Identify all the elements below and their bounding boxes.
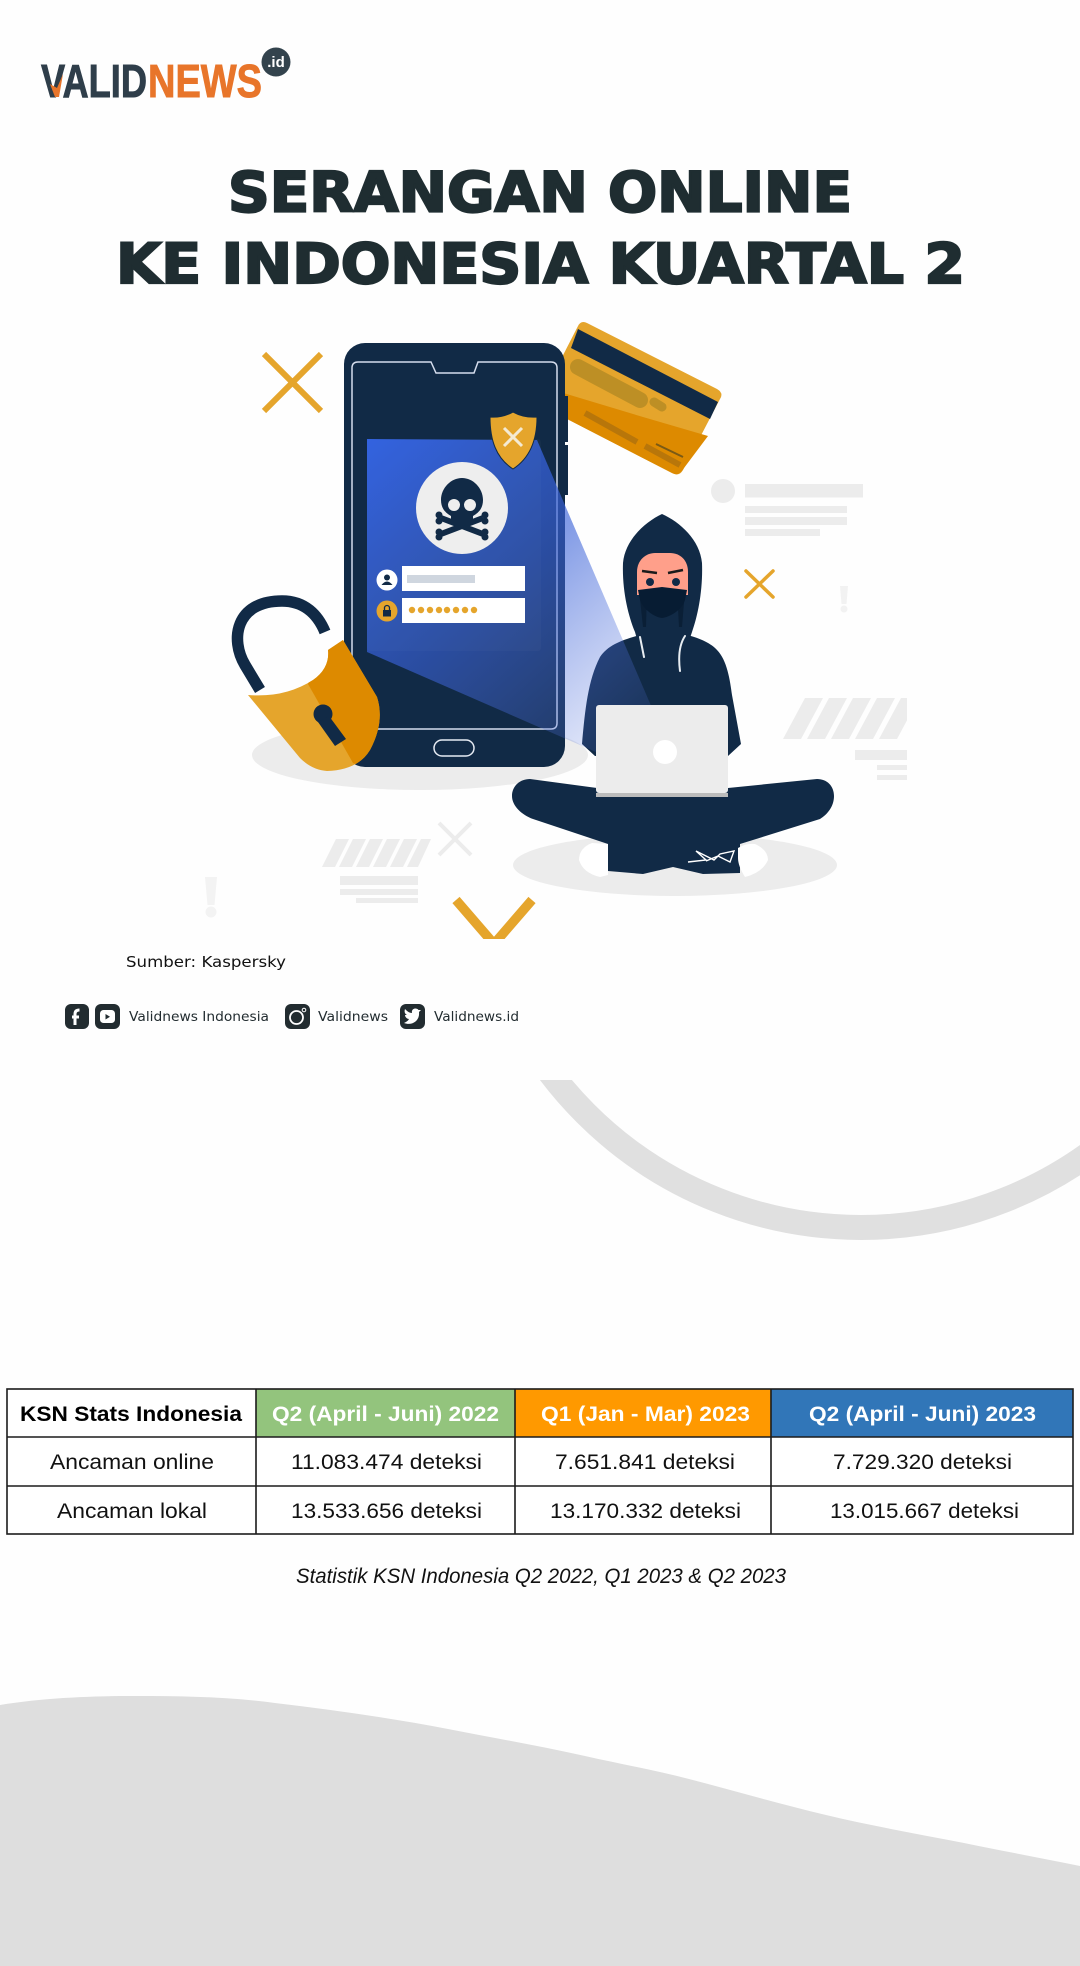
hacker brows (642, 570, 683, 573)
twitter icon (400, 1004, 425, 1029)
header: Q2 2022: Q2 (April - Juni) 2022 (272, 1403, 499, 1426)
hood strings (640, 636, 685, 671)
skull eyes (448, 499, 476, 511)
skull head (441, 478, 483, 526)
instagram icon (285, 1004, 310, 1029)
instagram label: Validnews (318, 1009, 388, 1025)
youtube icon (95, 1004, 120, 1029)
card small pill (654, 402, 662, 407)
padlock body dark (308, 640, 380, 764)
shield icon (490, 412, 537, 469)
light beam from phone (367, 439, 655, 760)
laptop lid (596, 705, 728, 793)
header: Q2 2023: Q2 (April - Juni) 2023 (809, 1403, 1036, 1426)
smartphone (344, 343, 568, 767)
card signature (656, 444, 683, 457)
padlock shackle (237, 601, 325, 690)
statistics table (7, 1389, 1073, 1534)
logo id badge (262, 48, 290, 76)
header: KSN Stats Indonesia: KSN Stats Indonesia (20, 1403, 242, 1426)
online Q2 2023: 7.729.320 deteksi (833, 1451, 1012, 1474)
logo (41, 48, 290, 107)
card base (538, 322, 721, 474)
faint exclamation left (205, 877, 217, 918)
lock icon (376, 600, 398, 622)
right foot (738, 844, 768, 877)
shield cross (504, 428, 522, 446)
laptop logo (653, 740, 677, 764)
credit card (538, 322, 721, 474)
lokal Q2 2022: 13.533.656 deteksi (291, 1500, 482, 1523)
facebook youtube label: Validnews Indonesia (129, 1009, 269, 1025)
table grid (7, 1389, 1073, 1534)
lokal Q1 2023: 13.170.332 deteksi (550, 1500, 741, 1523)
ground shadow phone (252, 720, 588, 790)
ground shadow hacker (513, 834, 837, 896)
table caption: Statistik KSN Indonesia Q2 2022, Q1 2023 & Q2 2023 (296, 1565, 786, 1588)
gold chevron (456, 900, 532, 944)
title (116, 160, 965, 296)
header: Q1 2023: Q1 (Jan - Mar) 2023 (541, 1403, 750, 1426)
logo V accent (50, 74, 63, 97)
hacker face (637, 553, 688, 595)
laptop and legs (512, 705, 834, 877)
phone home button (434, 740, 474, 756)
shield shape (490, 412, 537, 469)
user icon (376, 570, 398, 590)
gold cross right (746, 571, 773, 597)
table row: Ancaman online (50, 1451, 1012, 1474)
password field (402, 598, 525, 623)
card lower tone (538, 392, 708, 474)
logo id badge: .id (267, 54, 285, 71)
hacker body (582, 635, 741, 756)
facebook icon (65, 1004, 89, 1029)
online Q1 2023: 7.651.841 deteksi (555, 1451, 735, 1474)
hacker mask (638, 587, 687, 618)
faint background marks (205, 479, 919, 918)
padlock keyhole (314, 704, 346, 746)
row label lokal: Ancaman lokal (57, 1500, 207, 1523)
faint info card right (711, 479, 863, 536)
faint cross (439, 823, 471, 855)
hacker eyes (646, 578, 680, 586)
gold cross top left (264, 354, 321, 411)
row label online: Ancaman online (50, 1451, 214, 1474)
login form (376, 566, 525, 623)
card number lines (585, 413, 680, 465)
phone screen outline (352, 362, 557, 729)
lokal Q2 2023: 13.015.667 deteksi (830, 1500, 1019, 1523)
phone body (344, 343, 565, 767)
laptop base (596, 793, 728, 797)
table header fills (7, 1389, 1073, 1534)
logo wordmark NEWS: NEWS (148, 55, 262, 107)
padlock body light (248, 640, 380, 771)
phone side buttons (565, 396, 568, 495)
decorative grey arc (540, 1080, 1080, 1240)
padlock (237, 601, 390, 780)
table row: Ancaman lokal (57, 1500, 1019, 1523)
faint stripes right (783, 698, 919, 780)
illustration (205, 322, 919, 944)
source note: Sumber: Kaspersky (126, 953, 286, 971)
card chip bar (578, 367, 640, 400)
crossbones (436, 512, 488, 540)
phone screen panel tint (367, 439, 541, 651)
hacker legs (512, 779, 834, 874)
username field (402, 566, 525, 591)
shoelaces (688, 851, 734, 862)
card magnetic stripe (571, 329, 718, 419)
online Q2 2022: 11.083.474 deteksi (291, 1451, 482, 1474)
hacker hood (623, 514, 702, 650)
faint stripes left (322, 839, 431, 903)
table header row (20, 1403, 1036, 1426)
logo wordmark VALID: VALID (41, 55, 147, 107)
social links (65, 1004, 519, 1029)
hood inner shading (639, 590, 685, 627)
left foot (579, 843, 608, 877)
hacker torso (582, 514, 741, 756)
title line 1: SERANGAN ONLINE (228, 160, 852, 224)
faint exclamation right (840, 586, 848, 612)
twitter label: Validnews.id (434, 1009, 519, 1025)
title line 2: KE INDONESIA KUARTAL 2 (116, 232, 965, 296)
skull icon (416, 462, 508, 554)
bottom grey wave (0, 1696, 1080, 1966)
skull badge (416, 462, 508, 554)
